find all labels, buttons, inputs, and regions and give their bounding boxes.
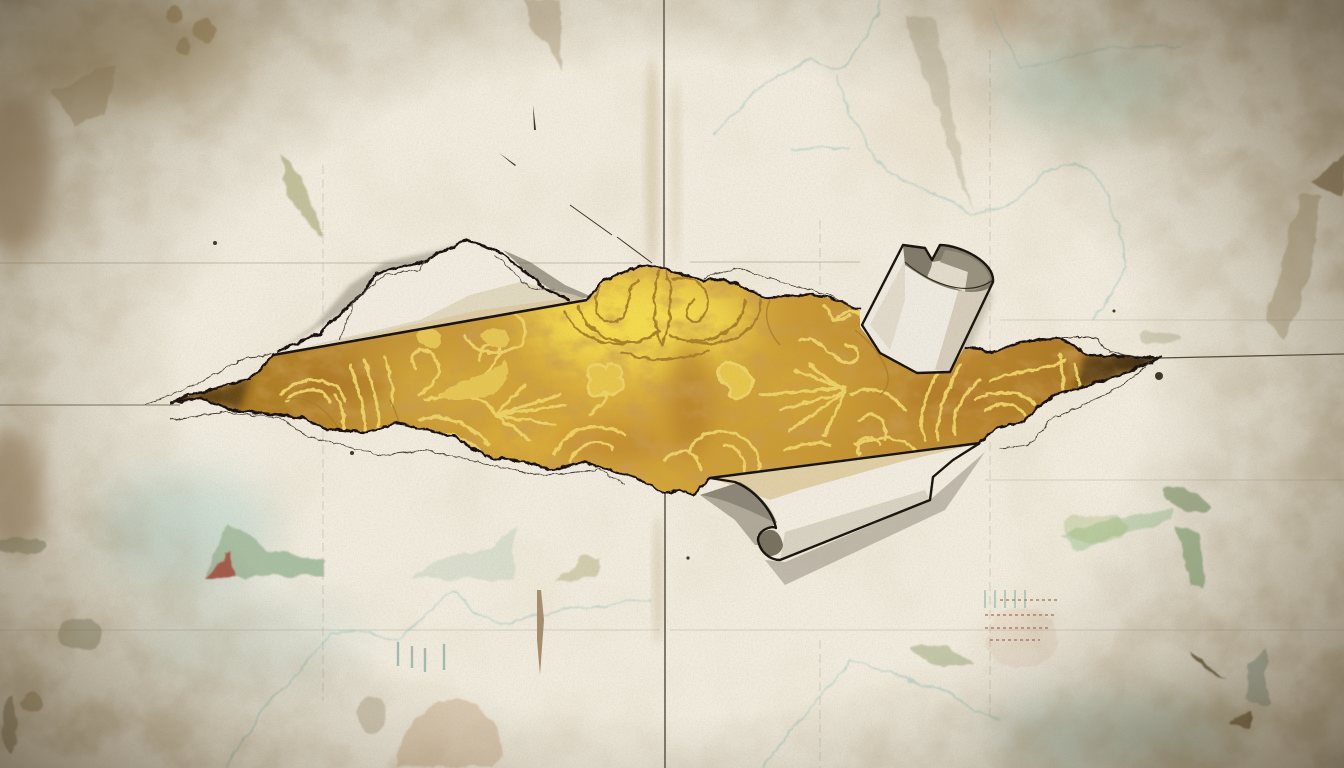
tear outline: [170, 265, 1160, 495]
bottom torn flap with curl: [700, 443, 980, 560]
right ornament: [665, 305, 1080, 472]
filled highlights on left bird motif: [415, 328, 510, 400]
gold base: [181, 266, 1156, 494]
top torn paper flap: [273, 240, 587, 355]
left ornament: [280, 312, 625, 462]
ink specks and scratches: [213, 105, 1163, 675]
thin ornament engraving lines: [285, 300, 888, 430]
shadows under the torn flaps: [277, 243, 995, 585]
rolled scroll curl top right: [862, 245, 993, 373]
central double medallion ornament: [565, 270, 760, 359]
thin secondary tear edges: [145, 268, 1150, 485]
gold light and dark mottling: [183, 266, 1154, 484]
map rivers: [225, 0, 1180, 768]
torn tear: gold damask layer: [181, 266, 1156, 494]
